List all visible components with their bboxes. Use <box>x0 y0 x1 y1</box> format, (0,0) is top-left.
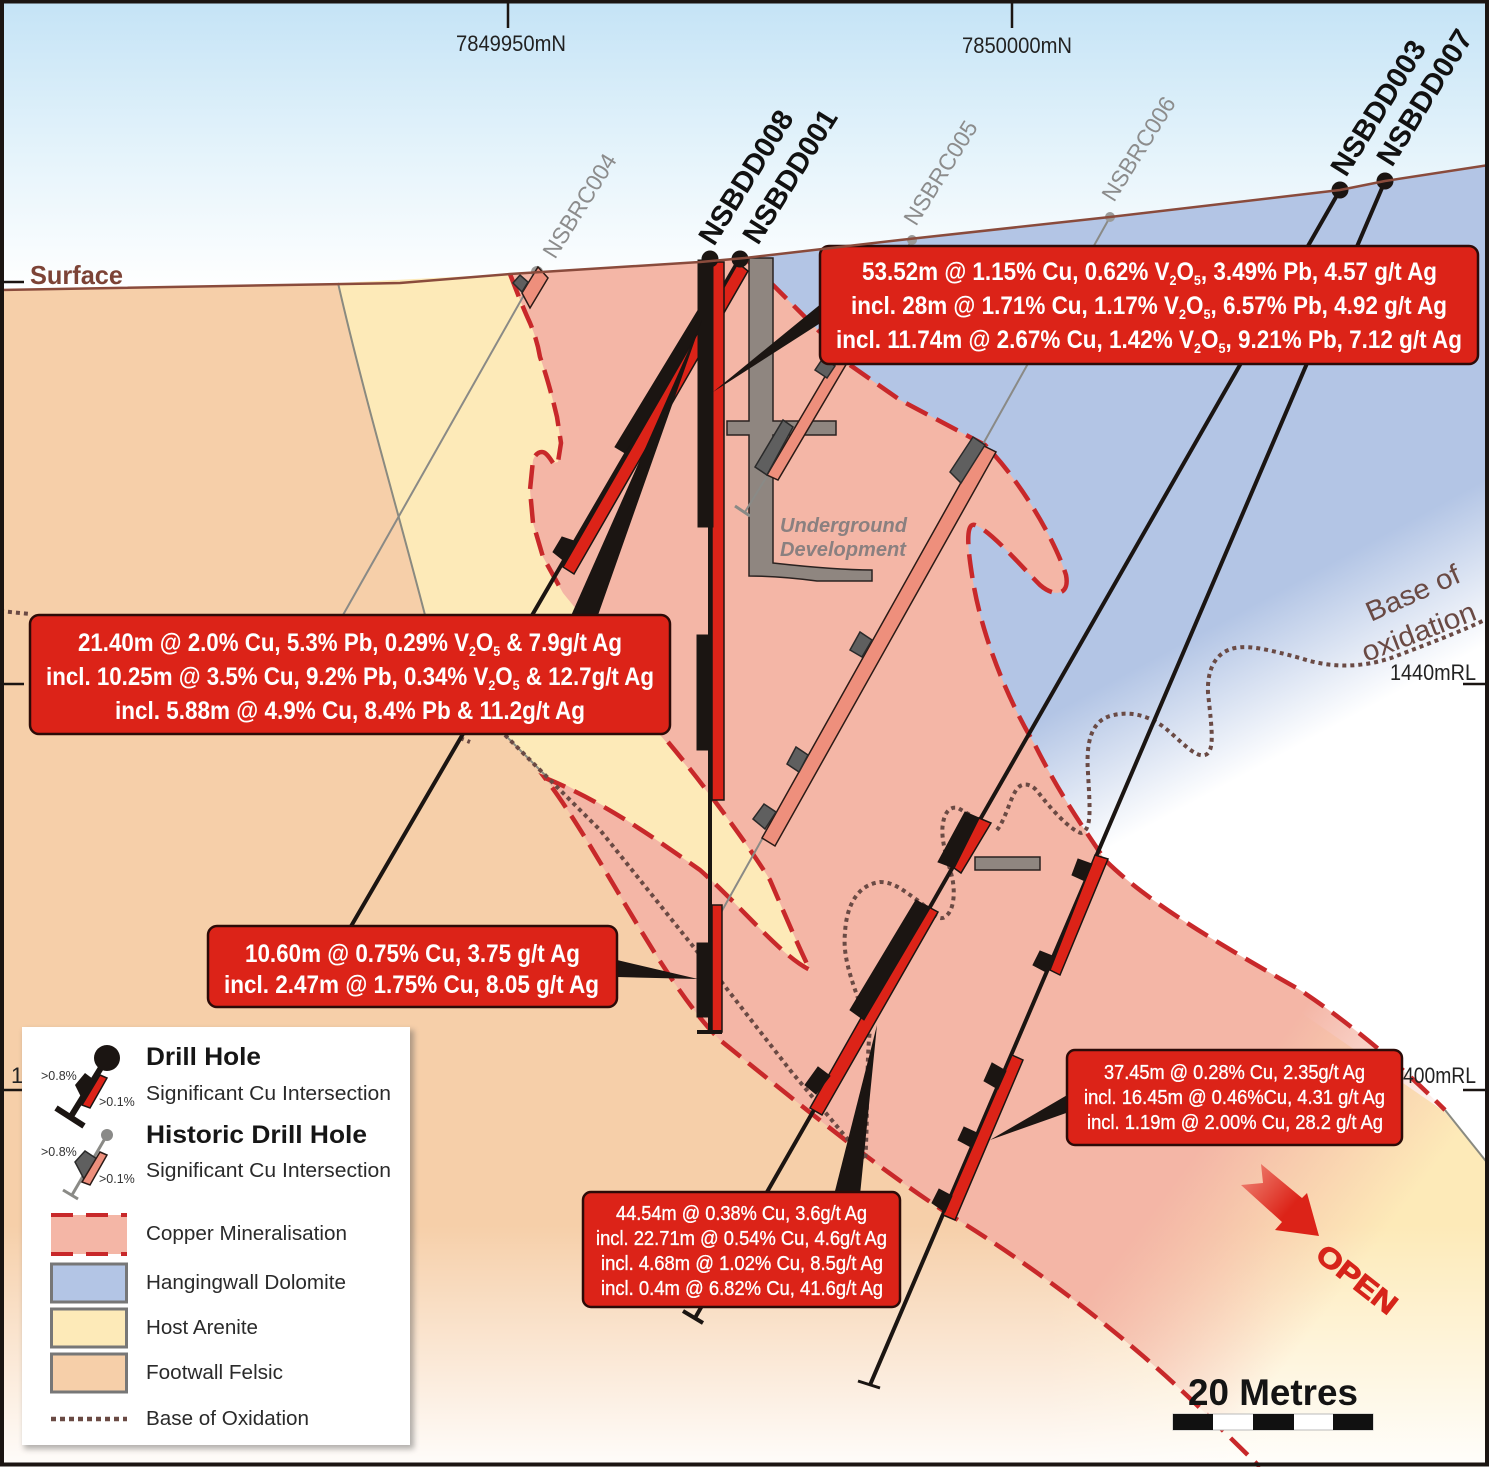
geology: copper mineralisation <box>510 258 1489 1467</box>
open label: OPEN <box>1310 1238 1403 1321</box>
drill hole labels: NSBDD008 <box>693 105 800 251</box>
axis labels: 400mRL <box>1403 1063 1476 1088</box>
geology: hangingwall dolomite <box>745 165 1489 940</box>
base of oxidation label <box>1357 558 1480 668</box>
legend swatch: base of oxidation <box>51 1417 127 1421</box>
callout: 53.52m intersection: 2 <box>1169 272 1177 288</box>
callout: 21.40m intersection: incl. 5.88m @ 4.9% Cu, 8.4% Pb & 11.2g/t Ag <box>115 697 585 725</box>
historic drill hole labels: NSBRC005 <box>898 116 983 230</box>
callout: 53.52m intersection: 5 <box>1218 340 1226 356</box>
callout: 21.40m intersection: & 7.9g/t Ag <box>500 629 622 657</box>
callout: 21.40m intersection: 2 <box>488 677 495 693</box>
contact lines <box>338 283 1489 1165</box>
callout: 53.52m intersection: 53.52m @ 1.15% Cu, 0.62% V <box>862 258 1205 286</box>
callout: 37.45m intersection: incl. 16.45m @ 0.46%Cu, 4.31 g/t Ag <box>1084 1087 1385 1109</box>
footwall fade to white <box>0 1225 1489 1467</box>
drill hole NSBDD007 <box>858 172 1394 1388</box>
legend item labels: Hangingwall Dolomite <box>146 1272 346 1294</box>
callout: 53.52m intersection: , 3.49% Pb, 4.57 g/t Ag <box>1201 258 1437 286</box>
panel: legend <box>22 1027 414 1449</box>
legend threshold labels: >0.8% <box>41 1069 77 1083</box>
callout: 37.45m intersection: 37.45m @ 0.28% Cu, 2.35g/t Ag <box>1104 1062 1365 1084</box>
axis labels: 7849950mN <box>456 31 566 56</box>
callout: 44.54m intersection: incl. 0.4m @ 6.82% Cu, 41.6g/t Ag <box>601 1278 883 1300</box>
legend threshold labels <box>41 1069 135 1186</box>
drill hole labels: NSBDD007 <box>1371 24 1480 172</box>
underground development workings <box>727 258 1040 870</box>
axis labels: 7850000mN <box>962 33 1072 58</box>
legend swatch: footwall felsic <box>52 1354 126 1392</box>
callout: 53.52m intersection: 2 <box>1179 306 1186 322</box>
legend item labels: Footwall Felsic <box>146 1362 283 1384</box>
callout: 53.52m intersection: 5 <box>1194 272 1201 288</box>
underground development label: Underground <box>780 514 907 537</box>
background sky <box>0 0 1489 290</box>
callout: 53.52m intersection: incl. 11.74m @ 2.67% Cu, 1.42% V <box>836 326 1234 354</box>
historic drill hole labels <box>537 92 1181 263</box>
geology: host arenite <box>338 274 810 970</box>
callout: 53.52m intersection: 2 <box>1194 340 1201 356</box>
callout: 10.60m intersection: incl. 2.47m @ 1.75% Cu, 8.05 g/t Ag <box>224 971 599 999</box>
legend item labels: Significant Cu Intersection <box>146 1160 391 1182</box>
base of oxidation label: oxidation <box>1357 596 1480 668</box>
historic drill hole labels: NSBRC004 <box>537 149 622 263</box>
axis labels <box>11 31 1476 1088</box>
callout leaders <box>570 303 1069 1195</box>
callout: 21.40m intersection: O <box>495 663 513 691</box>
callout: 21.40m intersection: O <box>476 629 493 657</box>
historic drill hole labels: NSBRC006 <box>1096 92 1181 206</box>
legend item labels: Base of Oxidation <box>146 1408 309 1430</box>
open arrow <box>1241 1164 1319 1236</box>
axis labels: 1 <box>11 1063 23 1088</box>
legend threshold labels: >0.1% <box>99 1172 135 1186</box>
legend swatch: copper mineralisation <box>51 1215 127 1254</box>
drill hole NSBDD003 <box>683 182 1348 1323</box>
legend drill hole headings: Historic Drill Hole <box>146 1121 367 1149</box>
callout: 44.54m intersection: incl. 22.71m @ 0.54% Cu, 4.6g/t Ag <box>596 1228 887 1250</box>
callout: 10.60m intersection: 10.60m @ 0.75% Cu, 3.75 g/t Ag <box>245 940 580 968</box>
legend item labels: Significant Cu Intersection <box>146 1083 391 1105</box>
drill hole labels: NSBDD001 <box>737 104 844 250</box>
legend item labels: Host Arenite <box>146 1317 258 1339</box>
scale bar: 20 Metres <box>1188 1372 1358 1413</box>
legend threshold labels: >0.8% <box>41 1145 77 1159</box>
callout: 53.52m intersection: O <box>1186 292 1203 320</box>
callout: 44.54m intersection <box>583 1192 900 1307</box>
legend item labels <box>146 1083 391 1430</box>
callout: 44.54m intersection: 44.54m @ 0.38% Cu, 3.6g/t Ag <box>616 1203 867 1225</box>
legend swatch: host arenite <box>52 1309 126 1347</box>
callout: 21.40m intersection: 5 <box>493 643 500 659</box>
callout: 37.45m intersection <box>1067 1050 1402 1145</box>
surface line <box>0 165 1489 290</box>
drill hole labels <box>693 24 1480 251</box>
drill hole labels: NSBDD003 <box>1325 35 1433 182</box>
callout: 10.60m intersection <box>208 926 617 1007</box>
legend drill hole headings <box>146 1043 367 1149</box>
callout: 21.40m intersection <box>30 615 670 734</box>
callout: 21.40m intersection: 21.40m @ 2.0% Cu, 5.3% Pb, 0.29% V <box>78 629 516 657</box>
base of oxidation label: Base of <box>1361 558 1465 627</box>
callout: 21.40m intersection: 5 <box>513 677 520 693</box>
callout: 21.40m intersection: 2 <box>469 643 476 659</box>
legend swatch: hangingwall dolomite <box>52 1264 126 1302</box>
callout: 53.52m intersection <box>820 246 1478 364</box>
axis labels: 1440mRL <box>1390 660 1476 685</box>
legend drill hole headings: Drill Hole <box>146 1043 261 1071</box>
legend threshold labels: >0.1% <box>99 1095 135 1109</box>
underground development label: Development <box>780 538 907 561</box>
legend item labels: Copper Mineralisation <box>146 1223 347 1245</box>
mineralisation boundary dashes <box>510 258 1445 1467</box>
icon: drill hole <box>56 1045 120 1126</box>
callout: 21.40m intersection: & 12.7g/t Ag <box>520 663 654 691</box>
scale bar <box>1173 1372 1373 1430</box>
drill hole NSBDD008 <box>697 250 724 1034</box>
underground development label <box>780 514 907 561</box>
callout: 53.52m intersection: O <box>1201 326 1218 354</box>
callout: 37.45m intersection: incl. 1.19m @ 2.00% Cu, 28.2 g/t Ag <box>1087 1112 1383 1134</box>
historic drill hole NSBRC005 <box>735 235 917 516</box>
callout: 21.40m intersection: incl. 10.25m @ 3.5% Cu, 9.2% Pb, 0.34% V <box>46 663 541 691</box>
callout: 53.52m intersection: O <box>1176 258 1194 286</box>
callout: 53.52m intersection: incl. 28m @ 1.71% Cu, 1.17% V <box>851 292 1216 320</box>
base of oxidation line <box>0 611 1489 1160</box>
icon: historic drill hole <box>63 1129 113 1199</box>
callout: 53.52m intersection: , 6.57% Pb, 4.92 g/t Ag <box>1210 292 1447 320</box>
callout: 44.54m intersection: incl. 4.68m @ 1.02% Cu, 8.5g/t Ag <box>601 1253 883 1275</box>
historic drill hole NSBRC004 <box>343 266 548 615</box>
surface label: Surface <box>30 260 123 290</box>
callout: 53.52m intersection: 5 <box>1203 306 1211 322</box>
drill hole NSBDD001 <box>350 250 748 928</box>
callout: 53.52m intersection: , 9.21% Pb, 7.12 g/t Ag <box>1226 326 1462 354</box>
historic drill hole NSBRC006 <box>714 212 1115 925</box>
